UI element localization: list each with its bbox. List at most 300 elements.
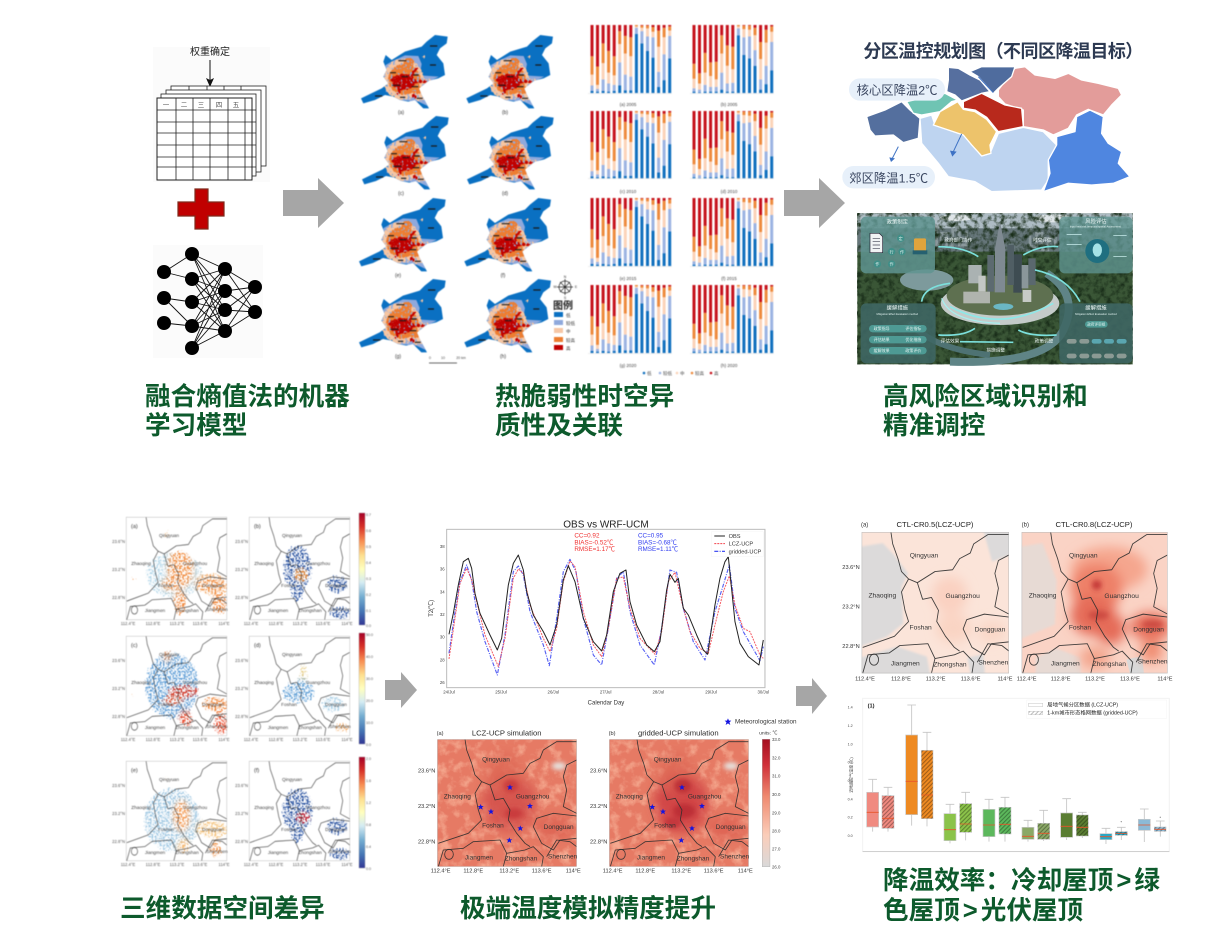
- map (d) height: (d): [254, 643, 261, 649]
- colorbar 0 to 2: 1.2: [366, 801, 371, 805]
- map (f) volume: [235, 761, 353, 867]
- panel: OBS vs WRF-UCM line chart: [428, 519, 769, 706]
- map: gridded-UCP: [590, 728, 753, 875]
- map (d) height: 23.2°N: [235, 686, 248, 691]
- map: CTL-CR0.8: 112.4°E: [1017, 676, 1037, 682]
- chart (f): (f) 2015: [721, 276, 737, 281]
- map: CTL-CR0.8: 114°E: [1157, 676, 1173, 682]
- map (a) fraction: (a): [131, 524, 138, 530]
- map (a): [361, 35, 448, 108]
- map: gridded-UCP: gridded-UCP simulation: [638, 728, 719, 737]
- map: LCZ-UCP: (a): [437, 731, 444, 737]
- callout: suburban zone: [842, 166, 935, 188]
- map legend: 高: [566, 345, 571, 352]
- map: LCZ-UCP: 23.2°N: [418, 804, 435, 810]
- map (c) height: 112.4°E: [121, 737, 136, 742]
- map (f) volume: Zhongshan: [298, 850, 322, 855]
- map (b) fraction: Zhaoqing: [254, 561, 274, 566]
- colorbar 0 to 50: 20.0: [366, 699, 373, 703]
- map: gridded-UCP: 23.2°N: [590, 804, 607, 810]
- info box: policy: [861, 217, 935, 273]
- map (c) height: Qingyuan: [159, 652, 179, 657]
- heading: spatiotemporal heterogeneity: 热脆弱性时空异: [495, 382, 674, 411]
- map (d) height: Jiangmen: [268, 725, 289, 730]
- map (a) fraction: Zhongshan: [175, 608, 199, 613]
- colorbar 0 to 50: 0.0: [366, 743, 371, 747]
- label: weight determination: 权重确定: [190, 45, 230, 58]
- outliers: [1121, 817, 1161, 822]
- map legend: 较高: [566, 337, 575, 344]
- y axis ticks: [440, 544, 445, 685]
- map: CTL-CR0.8: Jiangmen: [1051, 660, 1080, 667]
- map (e): [359, 198, 446, 271]
- map: LCZ-UCP: 113.6°E: [532, 869, 552, 875]
- plot frame: [447, 529, 765, 688]
- map (c) height: 113.2°E: [170, 737, 185, 742]
- map: CTL-CR0.5: 114°E: [997, 676, 1013, 682]
- y axis: 0.2: [848, 816, 853, 820]
- map: CTL-CR0.8: Guangzhou: [1104, 593, 1139, 600]
- map: CTL-CR0.8: CTL-CR0.8(LCZ-UCP): [1055, 520, 1133, 529]
- x axis ticks: 25/Jul: [495, 690, 507, 695]
- panel: cooling maps: [842, 520, 1173, 682]
- whiskers: [868, 705, 1165, 844]
- map (a) fraction: Foshan: [158, 583, 174, 588]
- info box: mitigation left: 评估指标: [905, 325, 921, 331]
- map: CTL-CR0.5: Shenzhen: [978, 659, 1009, 666]
- metrics: LCZ-UCP: [574, 533, 616, 553]
- bar legend: 较高: [695, 370, 704, 377]
- map (f) volume: 112.8°E: [269, 862, 284, 867]
- map (b) fraction: 113.6°E: [316, 621, 331, 626]
- panel: 3D data spatial differences: [112, 513, 373, 871]
- map (e) volume: 23.6°N: [112, 783, 125, 788]
- map (d) height: 113.2°E: [293, 737, 308, 742]
- heading: 3D data differences: 三维数据空间差异: [120, 894, 325, 923]
- temperature colorbar: 27.0: [772, 847, 781, 852]
- icon: compass: N: [564, 275, 567, 279]
- chart (g): (g) 2020: [620, 363, 637, 368]
- legend: OBS: [729, 534, 741, 540]
- skyscrapers: [963, 222, 1036, 310]
- map (b) fraction: 113.2°E: [293, 621, 308, 626]
- map: gridded-UCP: 113.6°E: [704, 869, 724, 875]
- scale bar: 10: [441, 356, 445, 360]
- panel: entropy weighting and machine learning: [145, 45, 350, 440]
- map (b) fraction: 23.2°N: [235, 567, 248, 572]
- map: CTL-CR0.8: Zhaoqing: [1029, 593, 1057, 600]
- map (c) height: 113.6°E: [193, 737, 208, 742]
- map: gridded-UCP: 112.4°E: [603, 869, 623, 875]
- map (d) height: Zhaoqing: [254, 680, 274, 685]
- map (d) height: Shenzhen: [329, 724, 351, 729]
- colorbar 0 to 0.7: 0.0: [366, 624, 371, 628]
- info box: policy: 作: [890, 261, 894, 267]
- temperature colorbar: units: ℃: [759, 731, 777, 737]
- map captions: (d): [502, 191, 508, 197]
- map (a) fraction: Shenzhen: [206, 607, 228, 612]
- map (a) fraction: Guangzhou: [183, 561, 208, 566]
- metrics: gridded-UCP: BIAS=-0.68℃: [638, 538, 678, 546]
- map (d): [467, 116, 554, 189]
- panel: cooling box plot: [847, 698, 1169, 852]
- temperature colorbar: 33.0: [772, 737, 781, 742]
- arrows: zone pointers: [889, 77, 993, 162]
- map (d) height: Foshan: [281, 702, 297, 707]
- y axis: [847, 706, 853, 838]
- info box: risk assessment: [1059, 217, 1133, 273]
- map: CTL-CR0.5: Foshan: [910, 624, 932, 631]
- colorbar 0 to 0.7: 0.7: [366, 513, 371, 517]
- map (c) height: Zhongshan: [175, 725, 199, 730]
- y axis ticks: 26: [440, 680, 445, 685]
- map: gridded-UCP: 114°E: [738, 869, 753, 875]
- map (b) fraction: Qingyuan: [282, 533, 302, 538]
- info box: mitigation left: 缓解措施: [887, 304, 909, 312]
- table background: [153, 47, 270, 182]
- chart (a): (a) 2005: [620, 102, 637, 107]
- map: gridded-UCP: Zhongshan: [677, 856, 710, 863]
- panel: simulated temperature maps: [418, 718, 797, 875]
- map: CTL-CR0.5: Jiangmen: [891, 660, 920, 667]
- map (f) volume: Guangzhou: [306, 805, 331, 810]
- map captions: (c): [398, 191, 404, 197]
- info box: policy: 政策制定: [887, 217, 909, 225]
- chart (f): [690, 198, 774, 281]
- arrow: bottom step one to two: [385, 672, 417, 708]
- map (f) volume: 22.8°N: [235, 839, 248, 844]
- map legend: 图例: [553, 299, 573, 312]
- metrics: gridded-UCP: CC=0.95: [638, 533, 664, 540]
- map (b) fraction: 112.8°E: [269, 621, 284, 626]
- chart (e): (e) 2015: [620, 276, 637, 281]
- chart (g): [588, 285, 672, 368]
- map (c) height: Zhaoqing: [131, 680, 151, 685]
- map (h): [464, 279, 551, 352]
- info box: policy: 行: [890, 248, 894, 254]
- map: gridded-UCP: Shenzhen: [720, 853, 750, 860]
- map (f) volume: (f): [254, 768, 259, 774]
- map (f) volume: Zhaoqing: [254, 805, 274, 810]
- heading: zoning plan: 分区温控规划图（不同区降温目标）: [863, 41, 1143, 62]
- map (e) volume: 112.4°E: [121, 862, 136, 867]
- map (a) fraction: 112.4°E: [121, 621, 136, 626]
- map captions: [395, 110, 508, 360]
- map (e) volume: 22.8°N: [112, 839, 125, 844]
- temperature colorbar: 29.0: [772, 810, 781, 815]
- map (f) volume: 113.2°E: [293, 862, 308, 867]
- temperature colorbar: 26.0: [772, 864, 781, 869]
- callout: core zone: 核心区降温2℃: [857, 83, 937, 97]
- map (b) fraction: Shenzhen: [329, 607, 351, 612]
- temperature colorbar: 28.0: [772, 828, 781, 833]
- panel label: (1): [868, 703, 875, 709]
- colorbar 0 to 50: [359, 633, 373, 747]
- station legend: Meteorological station: [735, 719, 797, 726]
- map (b) fraction: Foshan: [281, 583, 297, 588]
- map: CTL-CR0.8: (b): [1022, 523, 1029, 529]
- x axis ticks: 24/Jul: [443, 690, 455, 695]
- map (a) fraction: Zhaoqing: [131, 561, 151, 566]
- map (d) height: Dongguan: [325, 702, 347, 707]
- bar legend: 较低: [663, 370, 672, 377]
- chart (c): [588, 111, 672, 194]
- icon: stacked data tables: 二: [181, 102, 188, 109]
- icon: stacked data tables: 五: [233, 101, 240, 109]
- map (c) height: Jiangmen: [145, 725, 166, 730]
- map: CTL-CR0.5: Zhaoqing: [868, 593, 896, 600]
- icon: neural network: [153, 245, 263, 358]
- info box: mitigation right: Mitigation Effect Evaluation method: [1075, 312, 1117, 316]
- series: gridded-UCP: [449, 559, 763, 675]
- map (d) height: [235, 636, 353, 742]
- zone map: [867, 67, 1130, 192]
- map: gridded-UCP: 113.2°E: [671, 869, 691, 875]
- arrow: bottom step two to three: [796, 678, 827, 714]
- map (c) height: [112, 636, 232, 742]
- legend: gridded-UCP: [729, 549, 762, 555]
- map: CTL-CR0.5: Guangzhou: [945, 593, 980, 600]
- info box: mitigation right: [1059, 303, 1133, 363]
- chart (h): [690, 285, 774, 368]
- series: OBS: [449, 555, 763, 665]
- y axis ticks: 30: [440, 635, 445, 640]
- map: LCZ-UCP: Jiangmen: [465, 854, 493, 861]
- bar legend: [643, 370, 719, 377]
- map: gridded-UCP: Qingyuan: [654, 757, 682, 764]
- map: CTL-CR0.5: Zhongshan: [933, 662, 967, 669]
- map (a) fraction: 114°E: [218, 621, 230, 626]
- map (f) volume: Shenzhen: [329, 849, 351, 854]
- map (b) fraction: [235, 517, 353, 626]
- map (g): [359, 279, 446, 352]
- map: CTL-CR0.5: CTL-CR0.5(LCZ-UCP): [896, 520, 974, 529]
- heading: high-risk identification: 高风险区域识别和: [883, 381, 1088, 411]
- colorbar 0 to 0.7: 0.1: [366, 609, 371, 613]
- x axis ticks: 28/Jul: [653, 690, 664, 695]
- map (f) volume: Foshan: [281, 827, 297, 832]
- map: gridded-UCP: Zhaoqing: [616, 793, 643, 800]
- y axis: 0.0: [848, 834, 853, 838]
- chart (e): [588, 198, 672, 281]
- map (e) volume: 114°E: [218, 862, 230, 867]
- map (c) height: 112.8°E: [146, 737, 161, 742]
- info box: policy: 作: [900, 248, 904, 254]
- map (e) volume: Guangzhou: [183, 805, 208, 810]
- map (d) height: 23.6°N: [235, 658, 248, 663]
- map (d) height: 113.6°E: [316, 737, 331, 742]
- flow labels and arrows: 政策调整: [1035, 337, 1054, 344]
- heading: model: 融合熵值法的机器: [145, 382, 350, 411]
- legend: 局地气候分区数据 (LCZ-UCP): [1047, 701, 1118, 709]
- map: CTL-CR0.8: Shenzhen: [1138, 659, 1168, 666]
- map (d) height: 112.4°E: [244, 737, 259, 742]
- map (d) height: 112.8°E: [269, 737, 284, 742]
- map (e) volume: 113.6°E: [193, 862, 208, 867]
- map (f): [464, 198, 551, 271]
- map (b) fraction: 114°E: [341, 621, 353, 626]
- map (c): [362, 116, 449, 189]
- colorbar 0 to 2: 0.8: [366, 823, 371, 827]
- map (d) height: Zhongshan: [298, 725, 322, 730]
- axis titles: T2(℃): [428, 600, 435, 617]
- map (e) volume: 23.2°N: [112, 811, 125, 816]
- map: LCZ-UCP: 113.2°E: [499, 869, 519, 875]
- metrics: gridded-UCP: RMSE=1.11℃: [638, 545, 679, 553]
- chart (c): (c) 2010: [620, 189, 637, 194]
- x axis ticks: 26/Jul: [548, 690, 559, 695]
- map (c) height: (c): [131, 643, 138, 649]
- y axis: 1.0: [848, 742, 853, 746]
- map (d) height: Qingyuan: [282, 652, 302, 657]
- map legend: 低: [566, 312, 571, 319]
- icon: compass: W: [553, 285, 557, 289]
- x axis ticks: [443, 690, 769, 695]
- flow labels and arrows: 措施调整: [986, 347, 1005, 354]
- map: LCZ-UCP: 23.6°N: [418, 768, 435, 774]
- icon: red plus: [178, 189, 224, 229]
- x axis ticks: 27/Jul: [600, 690, 611, 695]
- map: CTL-CR0.5: 112.4°E: [855, 676, 875, 682]
- map captions: (a): [398, 110, 404, 116]
- legend: [712, 532, 763, 557]
- map (a) fraction: [112, 517, 231, 626]
- map (a) fraction: Qingyuan: [159, 533, 179, 538]
- map: CTL-CR0.5: (a): [861, 523, 868, 529]
- chart (d): (d) 2010: [721, 189, 738, 194]
- map: CTL-CR0.8: Zhongshan: [1093, 661, 1126, 668]
- map (c) height: Foshan: [158, 702, 174, 707]
- map (a) fraction: 113.2°E: [170, 621, 185, 626]
- info box: mitigation left: [861, 303, 936, 363]
- legend: LCZ-UCP: [729, 542, 753, 548]
- map: CTL-CR0.8: 112.8°E: [1051, 676, 1071, 682]
- chart (d): [690, 111, 774, 194]
- icon: stacked data tables: 四: [216, 101, 222, 109]
- flow labels and arrows: [922, 237, 1080, 354]
- map (e) volume: Qingyuan: [159, 777, 179, 782]
- info box: mitigation left: 政策指导: [874, 325, 890, 331]
- map (f) volume: 113.6°E: [316, 862, 331, 867]
- arrow: step one to two: [283, 178, 344, 228]
- info box: mitigation right: 政府评审组: [1087, 322, 1106, 327]
- temperature colorbar: 31.0: [772, 774, 781, 779]
- boxes: LCZ-UCP and gridded-UCP: [867, 735, 1166, 841]
- colorbar 0 to 0.7: 0.3: [366, 577, 371, 581]
- metrics: LCZ-UCP: BIAS=-0.52℃: [574, 538, 614, 546]
- colorbar 0 to 2: 2.0: [366, 757, 371, 761]
- colorbar 0 to 0.7: 0.4: [366, 561, 371, 565]
- circular district: [941, 276, 1059, 325]
- map captions: (g): [395, 354, 401, 360]
- map: CTL-CR0.5: Dongguan: [975, 627, 1006, 634]
- map: CTL-CR0.5: 113.2°E: [926, 676, 946, 682]
- map (c) height: Dongguan: [202, 702, 224, 707]
- colorbar 0 to 0.7: 0.2: [366, 593, 371, 597]
- chart (a): [588, 25, 672, 107]
- map (a) fraction: 112.8°E: [146, 621, 161, 626]
- map: LCZ-UCP: 114°E: [566, 869, 581, 875]
- map: CTL-CR0.5: 23.6°N: [842, 565, 860, 571]
- map: CTL-CR0.5: Qingyuan: [910, 552, 939, 559]
- y axis ticks: 34: [440, 589, 445, 594]
- map: CTL-CR0.8: Dongguan: [1133, 627, 1164, 634]
- map (e) volume: Shenzhen: [206, 849, 228, 854]
- map legend: [553, 299, 575, 352]
- chart frame: [863, 698, 1169, 852]
- map captions: (b): [502, 110, 508, 116]
- map (e) volume: Zhongshan: [175, 850, 199, 855]
- map: LCZ-UCP: 22.8°N: [418, 840, 435, 846]
- heading: spatiotemporal heterogeneity: 质性及关联: [495, 411, 623, 440]
- map (f) volume: 23.2°N: [235, 811, 248, 816]
- heading: cooling efficiency: 色屋顶: [883, 896, 960, 925]
- bar legend: 高: [714, 370, 719, 377]
- colorbar 0 to 2: 1.6: [366, 779, 371, 783]
- metrics: gridded-UCP: [638, 533, 679, 553]
- map legend: 中: [566, 328, 571, 335]
- map (a) fraction: 22.8°N: [112, 595, 125, 600]
- map (b) fraction: (b): [254, 524, 261, 530]
- map (a) fraction: Dongguan: [202, 583, 224, 588]
- scale bar: 20 km: [456, 356, 466, 360]
- heading: extreme temperature accuracy: 极端温度模拟精度提升: [460, 894, 716, 923]
- map: gridded-UCP: Jiangmen: [637, 854, 665, 861]
- temperature colorbar: 30.0: [772, 792, 781, 797]
- map (b) fraction: 112.4°E: [244, 621, 259, 626]
- y axis: 近地面空气温度 (℃): [847, 757, 853, 793]
- colorbar 0 to 0.7: [359, 513, 371, 628]
- metrics: LCZ-UCP: CC=0.92: [574, 533, 600, 540]
- map legend: 较低: [566, 320, 575, 327]
- panel: stacked bar charts: [588, 25, 774, 377]
- metrics: LCZ-UCP: RMSE=1.17℃: [574, 545, 616, 553]
- map (b) fraction: Guangzhou: [306, 561, 331, 566]
- map captions: (h): [500, 354, 506, 360]
- icon: compass: E: [575, 285, 578, 289]
- map (c) height: Guangzhou: [183, 680, 208, 685]
- info box: mitigation left: 评估结果: [874, 336, 890, 342]
- map (c) height: 23.6°N: [112, 658, 125, 663]
- map (c) height: 22.8°N: [112, 714, 125, 719]
- icon: compass: S: [564, 296, 567, 300]
- colorbar 0 to 50: 40.0: [366, 655, 373, 659]
- heading: high-risk identification: 精准调控: [883, 411, 985, 440]
- temperature colorbar: 32.0: [772, 755, 781, 760]
- callout: core zone: [849, 78, 945, 101]
- map (e) volume: Foshan: [158, 827, 174, 832]
- chart (b): [690, 25, 774, 107]
- callout: suburban zone: 郊区降温1.5℃: [849, 172, 928, 186]
- map: CTL-CR0.8: Foshan: [1069, 624, 1091, 631]
- map (e) volume: (e): [131, 768, 138, 774]
- info box: mitigation left: 优化措施: [905, 336, 921, 342]
- map (b) fraction: Zhongshan: [298, 608, 322, 613]
- map: gridded-UCP: 22.8°N: [590, 840, 607, 846]
- map (f) volume: 23.6°N: [235, 783, 248, 788]
- chart (b): (b) 2005: [721, 102, 738, 107]
- map (e) volume: Dongguan: [202, 827, 224, 832]
- info box: mitigation left: 政策评价: [905, 347, 921, 353]
- x axis ticks: 29/Jul: [705, 690, 717, 695]
- flow labels and arrows: 评估效果: [941, 337, 960, 344]
- map (e) volume: Jiangmen: [145, 850, 166, 855]
- y axis: 0.8: [848, 761, 853, 765]
- info box: policy: 作: [875, 261, 879, 267]
- y axis: 1.2: [848, 724, 853, 728]
- map (f) volume: Qingyuan: [282, 777, 302, 782]
- arrow: step two to three: [784, 178, 845, 228]
